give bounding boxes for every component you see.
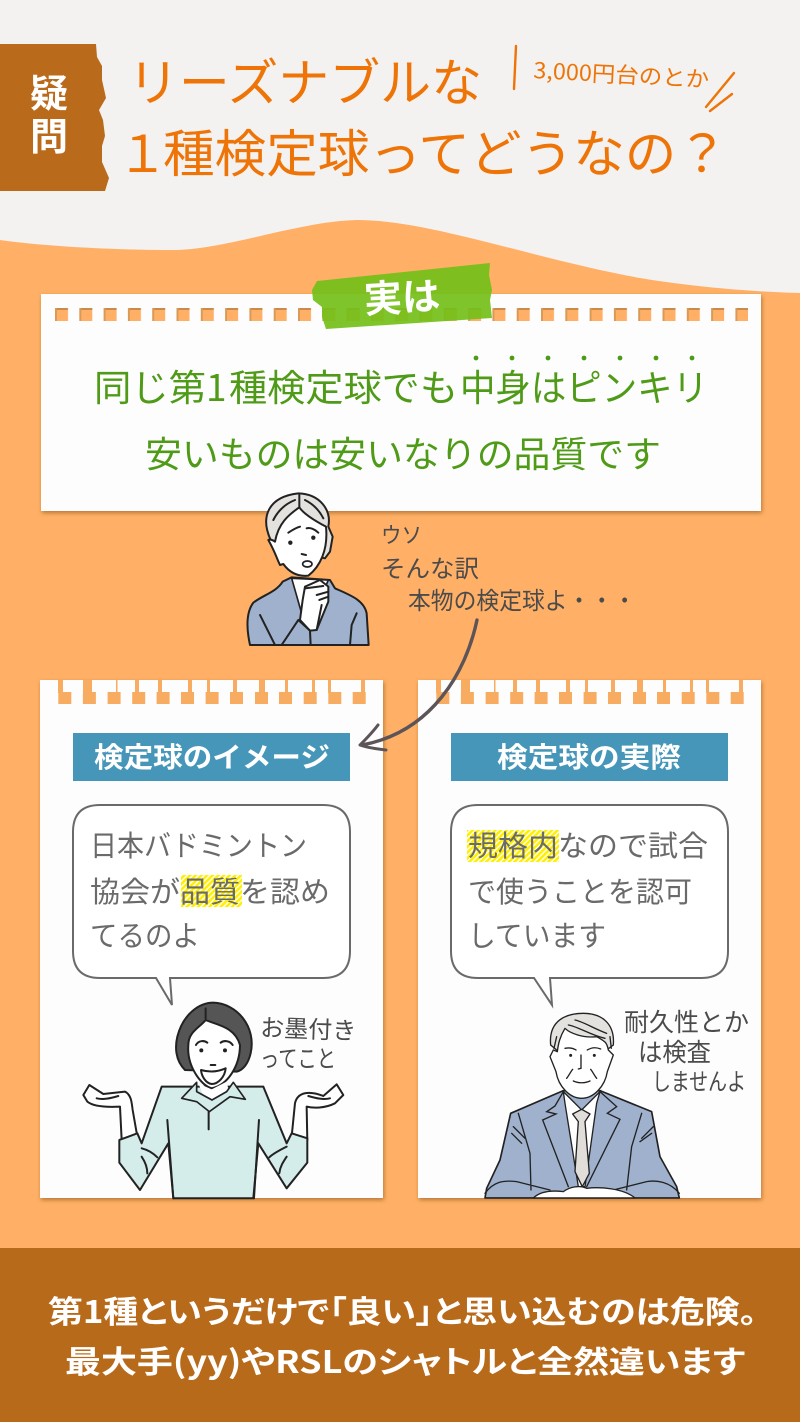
message text: 1 [206,358,227,412]
badge: 疑問: 疑 [30,74,68,116]
handwritten remark: ウソ そんな訳 本物の検定球よ [381,518,636,616]
handwritten remark: ウソ そんな訳 本物の検定球よ: そんな訳 [381,549,479,584]
panel: 実は message [41,294,761,511]
handwritten: 耐久性とかは検査しませんよ [624,1003,749,1097]
speech bubble: 規格内なので試合 [468,830,708,863]
footer band: 最大手(yy)やRSLのシャトルと全然違います [65,1337,745,1382]
heading: 検定球のイメージ [94,742,330,773]
heading [73,733,350,781]
speech bubble: 日本バドミントン [90,830,307,863]
footer band: 第1種というだけで「良い」と思い込むのは危険。 [48,1287,757,1332]
handwritten remark: ウソ そんな訳 本物の検定球よ: 本物の検定球よ・・・ [408,581,636,616]
title: 種検定球ってどうなの？ [163,126,728,183]
badge: 疑問 [0,44,109,191]
speech bubble: 協会が品質を認め [90,876,330,909]
badge: 疑問: 問 [30,117,68,159]
handwritten: お墨付きってこと: お墨付き [260,1008,357,1046]
handwritten aside: 3,000円台のとか: 3,000円台のとか [533,53,710,94]
handwritten: 耐久性とかは検査しませんよ: は検査 [638,1033,711,1069]
handwritten: お墨付きってこと [260,1008,357,1074]
message text: 同じ第 [94,368,206,409]
binder holes [55,308,748,321]
tape label: 実は [312,263,492,329]
handwritten aside: 3,000円台のとか [514,46,734,111]
torn binding holes [436,680,744,704]
handwritten: お墨付きってこと: ってこと [260,1039,336,1074]
message text [94,356,708,475]
footer band [0,1248,800,1422]
title [117,55,728,183]
message text: 種検定球でも [229,368,458,409]
message text: 中身はピンキリ [460,368,708,409]
speech bubble: てるのよ [90,921,200,953]
heading [451,733,728,781]
header background [0,0,800,300]
illustration: worried person [248,493,369,645]
handwritten: 耐久性とかは検査しませんよ: 耐久性とか [624,1003,749,1039]
speech bubble: で使うことを認可 [468,876,692,909]
panel: 検定球の実際 [418,680,761,1198]
illustration: shrugging woman [83,1003,343,1198]
speech bubble: しています [468,921,606,953]
handwritten remark: ウソ そんな訳 本物の検定球よ: ウソ [381,518,422,550]
speech bubble [451,805,728,1005]
illustration: businessman in suit [485,1013,679,1198]
arrow: curved pointer to 検定球のイメージ [360,620,477,750]
handwritten: 耐久性とかは検査しませんよ: しませんよ [652,1062,746,1097]
title: １ [117,126,168,183]
tape label: 実は: 実は [363,276,441,322]
panel: 検定球のイメージ [40,680,383,1198]
heading: 検定球の実際 [497,742,681,773]
speech bubble [73,805,350,1005]
torn binding holes [58,680,366,704]
title: リーズナブルな [128,55,482,112]
message text: 安いものは安いなりの品質です [145,434,661,475]
